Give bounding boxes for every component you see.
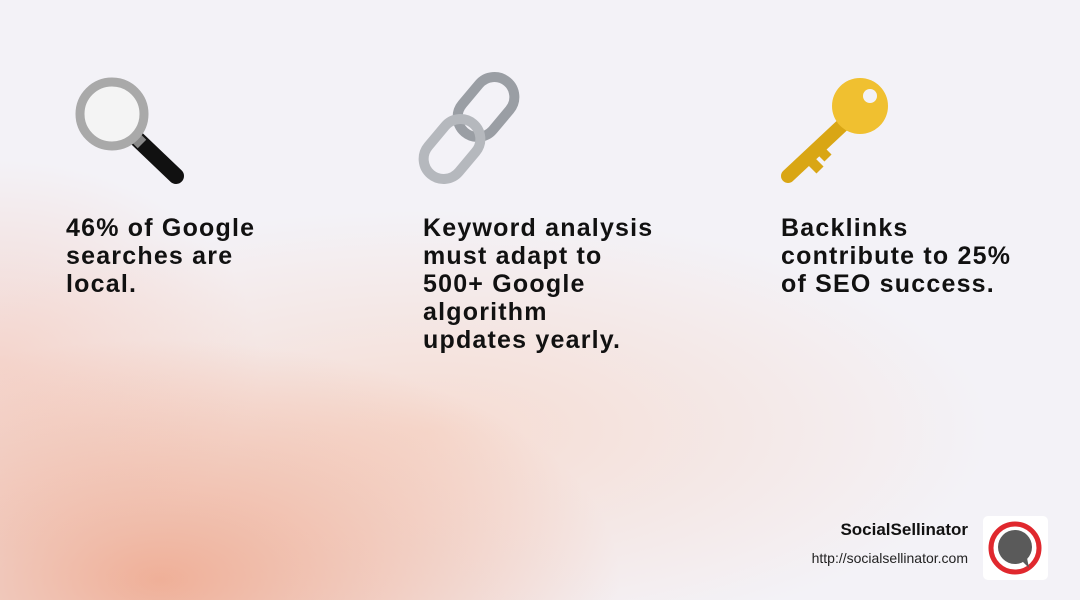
stat: algorithm updates: must adapt to	[423, 242, 602, 270]
stat: local searches	[66, 214, 255, 298]
stat: algorithm updates: updates yearly.	[423, 326, 621, 354]
stat: backlinks: contribute to 25%	[781, 242, 1011, 270]
icon: magnifying glass	[76, 78, 184, 184]
stat: backlinks	[781, 214, 1011, 298]
icon: key	[781, 78, 888, 183]
stat: algorithm updates: algorithm	[423, 298, 548, 326]
stat: backlinks: of SEO success.	[781, 270, 995, 298]
stat: local searches: local.	[66, 270, 137, 298]
stat: local searches: searches are	[66, 242, 233, 270]
stat: backlinks: Backlinks	[781, 214, 909, 242]
icon: chain link	[418, 72, 520, 184]
stat: algorithm updates: Keyword analysis	[423, 214, 653, 242]
logo	[983, 516, 1048, 580]
stat: algorithm updates: 500+ Google	[423, 270, 586, 298]
stat: algorithm updates	[423, 214, 653, 354]
brand url: http://socialsellinator.com	[812, 550, 968, 566]
stat: local searches: 46% of Google	[66, 214, 255, 242]
brand name: SocialSellinator	[840, 520, 968, 539]
